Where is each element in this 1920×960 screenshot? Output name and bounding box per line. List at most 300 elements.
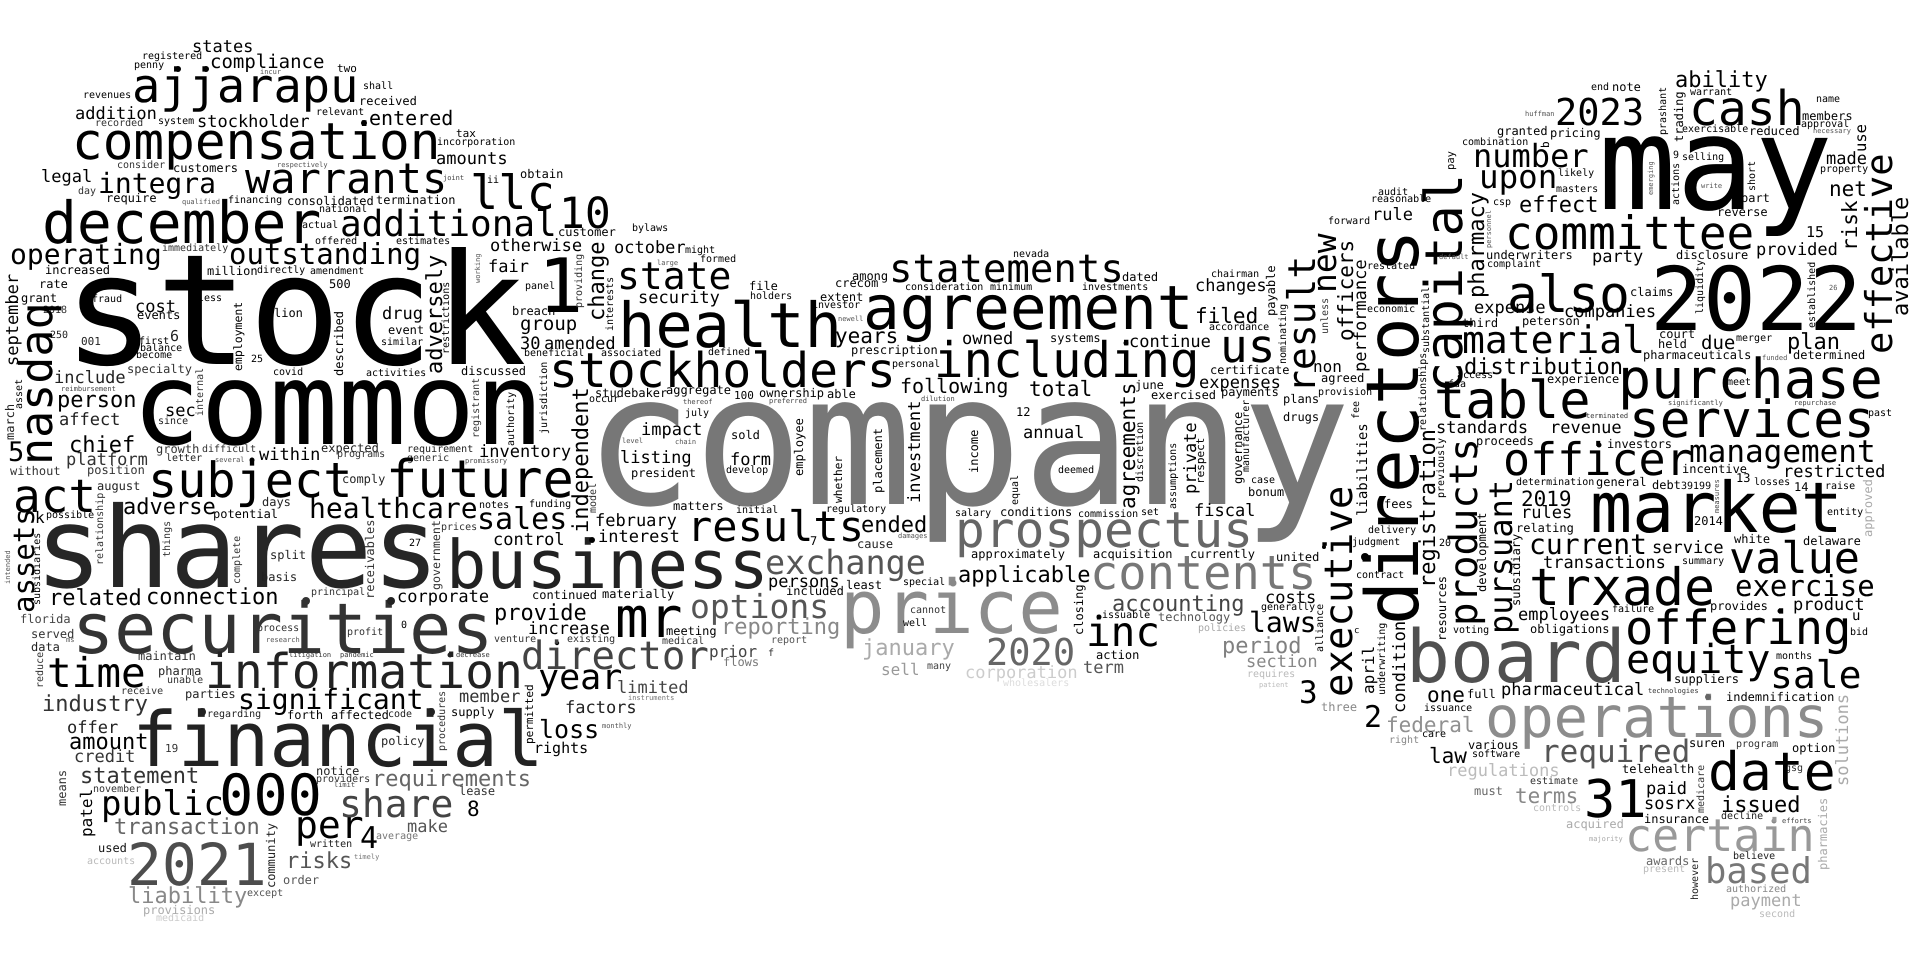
smaller words, middle right: experience — [1547, 372, 1619, 386]
smaller words, upper left: national — [319, 204, 367, 215]
smaller words, lower centre: many — [927, 661, 951, 672]
smaller words, upper right: material — [1462, 318, 1645, 362]
smaller words, lower centre: applicable — [958, 563, 1090, 588]
smaller words, right of centre: relationships — [1418, 353, 1429, 431]
smaller words, upper right: determined — [1793, 348, 1865, 362]
smaller words, upper right: note — [1612, 80, 1641, 94]
smaller words, upper left: integra — [98, 167, 216, 200]
smaller words, upper centre: formed — [700, 254, 736, 265]
smaller words, upper right: disclosure — [1676, 248, 1748, 262]
smaller words, upper centre: state — [617, 254, 731, 298]
smaller words, upper left: grant — [21, 291, 57, 305]
smaller words, middle right: months — [1776, 651, 1812, 662]
smaller words, upper left: march — [3, 404, 17, 440]
smaller words, right of centre: provision — [1318, 387, 1372, 398]
smaller words, upper centre: including — [934, 332, 1200, 389]
smaller words, lower centre: provide — [494, 601, 587, 626]
smaller words, right of centre: filed — [1195, 304, 1258, 328]
smaller words, upper left: activities — [366, 368, 426, 379]
smaller words, middle right: 14 — [1794, 480, 1808, 494]
smaller words, lower centre: acquisition — [1093, 547, 1172, 561]
word: committee: committee — [1505, 206, 1754, 260]
smaller words, middle right: resources — [1435, 576, 1449, 641]
smaller words, lower right: full — [1467, 687, 1496, 701]
smaller words, middle right: meet — [1727, 377, 1751, 388]
smaller words, lower left: decrease — [456, 651, 490, 659]
smaller words, upper left: events — [137, 308, 180, 322]
smaller words, lower left: medicaid — [156, 913, 204, 924]
word: securities: securities — [72, 588, 493, 670]
smaller words, upper left: directly — [257, 265, 305, 276]
smaller words, upper left: event — [388, 323, 424, 337]
smaller words, right of centre: result — [1280, 256, 1324, 393]
smaller words, lower left: liability — [128, 884, 247, 909]
smaller words, lower left: receive — [121, 686, 163, 697]
smaller words, upper centre: able — [827, 387, 856, 401]
smaller words, upper right: also — [1507, 266, 1630, 325]
smaller words, lower centre: monthly — [602, 722, 632, 730]
smaller words, upper left: adversely — [423, 255, 448, 374]
smaller words, upper right: cash — [1689, 81, 1805, 137]
smaller words, right of centre: drugs — [1283, 410, 1319, 424]
smaller words, middle right: 39199 — [1681, 481, 1711, 492]
smaller words, right of centre: dated — [1122, 270, 1158, 284]
smaller words, lower left: litigation — [289, 651, 331, 659]
smaller words, upper centre: jurisdiction — [539, 362, 550, 434]
smaller words, lower centre: least — [846, 578, 882, 592]
smaller words, lower left: relationship — [95, 493, 106, 565]
smaller words, middle right: determination — [1516, 477, 1594, 488]
smaller words, lower right: date — [1708, 742, 1836, 803]
smaller words, lower centre: funding — [529, 499, 571, 510]
smaller words, middle right: fda — [1448, 379, 1466, 390]
smaller words, upper centre: preferred — [769, 397, 807, 405]
smaller words, upper centre: authority — [506, 392, 517, 446]
smaller words, right of centre: rule — [1372, 205, 1413, 225]
smaller words, lower right: technologies — [1648, 687, 1699, 695]
smaller words, right of centre: fee — [1351, 401, 1362, 419]
smaller words, lower centre: period — [1222, 634, 1301, 659]
smaller words, lower left: related — [49, 586, 142, 611]
smaller words, lower left: subject — [148, 453, 352, 509]
smaller words, upper centre: file — [749, 279, 778, 293]
smaller words, upper centre: discussed — [461, 364, 526, 378]
smaller words, lower centre: medical — [662, 636, 704, 647]
smaller words, right of centre: total — [1029, 377, 1092, 401]
smaller words, lower left: except — [247, 888, 283, 899]
smaller words, upper right: expense — [1474, 298, 1546, 318]
smaller words, upper left: offered — [315, 236, 357, 247]
smaller words, middle right: 2014 — [1694, 514, 1723, 528]
smaller words, upper centre: october — [614, 238, 686, 258]
smaller words, lower centre: section — [1246, 652, 1318, 672]
smaller words, upper right: end — [1591, 82, 1609, 93]
smaller words, right of centre: payments — [1221, 385, 1279, 399]
smaller words, lower left: subsidiaries — [32, 533, 43, 605]
smaller words, lower left: unable — [167, 675, 203, 686]
smaller words, upper centre: personal — [892, 359, 940, 370]
smaller words, middle right: incentive — [1682, 462, 1747, 476]
word: market: market — [1590, 467, 1843, 549]
smaller words, lower centre: sell — [881, 660, 920, 679]
smaller words, middle right — [1434, 370, 1892, 697]
smaller words, middle right: product — [1793, 595, 1865, 615]
smaller words, upper centre: holders — [750, 291, 792, 302]
smaller words, lower left: providers — [316, 774, 370, 785]
word: stockholders: stockholders — [549, 343, 896, 399]
smaller words, lower left: time — [47, 649, 146, 697]
smaller words, upper centre: aggregate — [666, 383, 731, 397]
smaller words, lower centre: model — [588, 483, 599, 513]
smaller words, upper left: respectively — [277, 161, 328, 169]
smaller words, lower centre: 3 — [1299, 675, 1318, 711]
smaller words, upper centre: might — [685, 245, 715, 256]
smaller words, middle right: standards — [1436, 418, 1528, 438]
smaller words, lower centre: currently — [1190, 547, 1255, 561]
smaller words, upper left — [3, 37, 557, 465]
smaller words, lower right: pharmacies — [1816, 798, 1830, 870]
smaller words, lower centre: alliance — [1315, 604, 1326, 652]
smaller words, lower centre: year — [538, 658, 622, 698]
word: capital: capital — [1415, 174, 1475, 393]
smaller words, lower left: pandemic — [340, 651, 374, 659]
smaller words, lower right: gsg — [1785, 763, 1803, 774]
smaller words, upper right: provided — [1756, 240, 1838, 260]
smaller words, middle right: development — [1475, 513, 1489, 592]
smaller words, lower right: payment — [1730, 891, 1802, 911]
smaller words, upper right: pricing — [1550, 126, 1601, 140]
smaller words, lower left: order — [283, 873, 319, 887]
smaller words, upper right: net — [1829, 177, 1867, 201]
smaller words, upper right: huffman — [1525, 110, 1555, 118]
smaller words, lower right: program — [1736, 739, 1778, 750]
smaller words, upper centre: inventory — [479, 442, 571, 462]
smaller words, right of centre: previously — [1436, 438, 1447, 498]
smaller words, lower right: authorized — [1726, 884, 1786, 895]
smaller words, upper left: compliance — [210, 51, 324, 73]
smaller words, upper centre: breach — [512, 304, 555, 318]
smaller words, upper right: part — [1741, 191, 1770, 205]
smaller words, lower centre: technology — [1158, 610, 1230, 624]
smaller words, lower centre: corporation — [965, 663, 1078, 683]
smaller words, right of centre: salary — [955, 508, 991, 519]
smaller words, upper left: consider — [117, 160, 165, 171]
smaller words, upper right — [1439, 68, 1914, 380]
word: contents: contents — [1090, 546, 1316, 601]
smaller words, upper right: third — [1462, 316, 1498, 330]
smaller words, upper centre: whether — [832, 456, 845, 503]
smaller words, upper centre: among — [852, 269, 888, 283]
smaller words, upper left: two — [337, 62, 357, 75]
smaller words, lower left: comply — [342, 472, 385, 486]
smaller words, middle right: general — [1596, 475, 1647, 489]
smaller words, lower centre: laws — [1249, 606, 1316, 639]
smaller words, lower left: difficult — [202, 444, 256, 455]
smaller words, upper right: masters — [1556, 184, 1598, 195]
smaller words, lower left: public — [101, 784, 224, 824]
smaller words, middle right: terminated — [1586, 412, 1628, 420]
smaller words, right of centre: continue — [1129, 332, 1211, 352]
smaller words, lower right: majority — [1589, 835, 1623, 843]
smaller words, upper centre: 10 — [559, 189, 611, 239]
smaller words, lower left: lease — [459, 784, 495, 798]
smaller words, upper centre: 100 — [734, 389, 754, 402]
smaller words, lower left: ms — [66, 636, 74, 644]
smaller words, lower left: k — [35, 508, 45, 527]
smaller words, upper left: addition — [75, 104, 157, 124]
smaller words, lower left — [4, 433, 574, 924]
word: december: december — [42, 189, 321, 257]
smaller words, lower centre: well — [903, 618, 927, 629]
smaller words, lower left: corporate — [397, 587, 489, 607]
smaller words, middle right: past — [1868, 408, 1892, 419]
smaller words, lower centre: approximately — [971, 547, 1065, 561]
smaller words, upper centre: newell — [838, 315, 863, 323]
smaller words, lower centre: generally — [1261, 602, 1315, 613]
smaller words, upper right: prashant — [1658, 87, 1669, 135]
smaller words, upper left: immediately — [162, 243, 228, 254]
word: stock: stock — [63, 222, 527, 401]
smaller words, right of centre: audit — [1378, 187, 1408, 198]
smaller words, middle right: delaware — [1803, 534, 1861, 548]
smaller words, upper left: penny — [134, 60, 164, 71]
smaller words, upper right: funded — [1762, 354, 1787, 362]
smaller words, lower centre: inc — [1086, 608, 1160, 656]
smaller words, lower centre: rights — [534, 739, 588, 757]
smaller words, middle right: revenue — [1550, 418, 1622, 438]
smaller words, lower centre: permitted — [523, 684, 536, 744]
smaller words, upper centre: interests — [605, 277, 616, 331]
word: prospectus: prospectus — [955, 501, 1253, 559]
smaller words, lower centre: instruments — [628, 694, 674, 702]
smaller words, lower centre: increase — [528, 619, 610, 639]
smaller words, upper right: due — [1701, 332, 1735, 354]
smaller words, lower centre: control — [493, 530, 565, 550]
smaller words, upper left: joint — [443, 174, 464, 182]
smaller words, right of centre: bonum — [1248, 485, 1284, 499]
smaller words, right of centre: governance — [1231, 412, 1245, 484]
smaller words, upper centre: bylaws — [632, 223, 668, 234]
smaller words, lower left: credit — [74, 747, 135, 767]
smaller words, upper left: drug — [382, 304, 423, 324]
smaller words, lower left: receivables — [363, 520, 377, 599]
smaller words, lower centre: delivery — [1368, 525, 1416, 536]
smaller words, right of centre: deemed — [1058, 465, 1094, 476]
smaller words, lower right: care — [1422, 729, 1446, 740]
smaller words, lower left: used — [98, 841, 127, 855]
smaller words, middle right: 13 — [1736, 471, 1750, 485]
smaller words, lower centre: interest — [598, 527, 680, 547]
smaller words, upper centre: president — [631, 466, 696, 480]
smaller words, lower centre: loss — [539, 715, 599, 744]
smaller words, upper centre: prescription — [851, 343, 938, 357]
smaller words, upper right: short — [1747, 161, 1758, 191]
smaller words, upper centre: panel — [525, 281, 555, 292]
smaller words, lower left: within — [259, 445, 320, 465]
smaller words, lower left: member — [459, 687, 520, 707]
smaller words, lower centre: requires — [1247, 669, 1295, 680]
word: business: business — [446, 526, 769, 604]
smaller words, middle right: management — [1689, 434, 1876, 470]
smaller words, upper left: increased — [45, 263, 110, 277]
smaller words, lower left: data — [31, 640, 60, 654]
smaller words, upper left: relevant — [316, 107, 364, 118]
smaller words, upper left: incorporation — [437, 137, 515, 148]
smaller words, upper left: reimbursement — [61, 385, 116, 393]
smaller words, middle right: bid — [1850, 627, 1868, 638]
smaller words, middle right: voting — [1453, 625, 1489, 636]
smaller words, right of centre: substantial — [1421, 287, 1432, 353]
smaller words, middle right: exercise — [1735, 569, 1875, 603]
smaller words, upper right: complaint — [1487, 259, 1541, 270]
smaller words, lower right: medicare — [1696, 765, 1707, 813]
smaller words, middle right: investors — [1607, 437, 1672, 451]
smaller words, right of centre: equal — [1010, 475, 1021, 505]
smaller words, upper centre: develop — [726, 465, 768, 476]
smaller words, upper left: 2018 — [43, 305, 67, 316]
smaller words, upper left: restrictions — [441, 282, 452, 354]
smaller words, lower right: decline — [1721, 811, 1763, 822]
smaller words, lower left: make — [407, 817, 448, 837]
smaller words, lower centre: prior — [709, 642, 758, 661]
smaller words, upper left: 6 — [170, 327, 179, 345]
smaller words, upper left: system — [158, 116, 194, 127]
smaller words, lower left: 5 — [8, 437, 24, 468]
smaller words, middle right: relating — [1516, 521, 1574, 535]
smaller words, upper right: personnel — [1485, 210, 1493, 248]
smaller words, lower centre: special — [903, 577, 945, 588]
smaller words, lower left: share — [339, 782, 453, 826]
smaller words, lower centre: existing — [567, 634, 615, 645]
smaller words, middle right: debt — [1652, 478, 1681, 492]
smaller words, lower left: 19 — [165, 742, 178, 755]
smaller words, lower right: second — [1759, 909, 1795, 920]
smaller words, upper centre: obtain — [520, 167, 563, 181]
smaller words, lower centre: factors — [565, 698, 637, 718]
word: operations: operations — [1485, 685, 1828, 751]
smaller words, lower centre: accounting — [1112, 592, 1244, 617]
smaller words, upper left: 25 — [251, 354, 263, 365]
smaller words, right of centre: assumptions — [1168, 443, 1179, 509]
smaller words, upper centre: ownership — [759, 386, 824, 400]
smaller words, upper centre: large — [657, 259, 678, 267]
smaller words, upper centre — [461, 166, 1200, 533]
smaller words, lower centre: cause — [857, 537, 893, 551]
smaller words, lower left: risks — [286, 849, 352, 874]
smaller words, right of centre: reasonable — [1371, 194, 1431, 205]
smaller words, lower left: 27 — [409, 538, 421, 549]
smaller words, right of centre: nominating — [1278, 304, 1289, 364]
smaller words, upper centre: llc — [470, 166, 555, 221]
smaller words, lower left: position — [87, 463, 145, 477]
smaller words, upper centre: investment — [905, 401, 925, 503]
smaller words, right of centre: agreements — [1116, 383, 1140, 509]
smaller words, middle right: subsidiary — [1509, 534, 1523, 606]
smaller words, lower centre: notes — [479, 500, 509, 511]
smaller words, upper right: combination — [1462, 137, 1528, 148]
word: compensation: compensation — [72, 113, 440, 172]
smaller words, upper right: 15 — [1806, 223, 1824, 241]
smaller words, lower centre: condition — [1390, 621, 1410, 713]
smaller words, lower centre: reporting — [721, 615, 840, 640]
smaller words, upper centre: otherwise — [490, 236, 582, 256]
smaller words, upper right: reverse — [1717, 205, 1768, 219]
smaller words, lower right: acquired — [1566, 817, 1624, 831]
smaller words, right of centre: performance — [1351, 259, 1371, 372]
smaller words, upper centre: statements — [889, 247, 1124, 292]
smaller words, lower left: written — [310, 839, 352, 850]
smaller words, upper left: asset — [14, 379, 25, 409]
smaller words, upper centre: security — [638, 288, 720, 308]
smaller words, upper left: financing — [228, 195, 282, 206]
smaller words, lower left: provisions — [143, 903, 215, 917]
smaller words, lower right: paid — [1646, 779, 1687, 799]
smaller words, lower left: principal — [311, 587, 365, 598]
smaller words, right of centre: liabilities — [1355, 423, 1371, 516]
smaller words, lower centre: sales — [477, 502, 567, 537]
smaller words, upper left: recorded — [95, 118, 143, 129]
smaller words, lower centre: f — [768, 648, 774, 659]
smaller words, middle right: measures — [1713, 479, 1721, 513]
smaller words, middle right: obligations — [1530, 622, 1609, 636]
smaller words, right of centre: respect — [1194, 438, 1207, 484]
smaller words, upper centre: change — [585, 242, 610, 321]
smaller words, right of centre: annual — [1023, 423, 1084, 443]
smaller words, upper right: warrant — [1690, 87, 1732, 98]
smaller words, right of centre — [955, 187, 1447, 588]
smaller words, upper right: merger — [1736, 333, 1772, 344]
smaller words, lower left: adverse — [123, 495, 216, 520]
smaller words, upper left: estimates — [396, 236, 450, 247]
smaller words, lower centre: 2 — [1364, 700, 1382, 735]
smaller words, lower centre: three — [1321, 700, 1357, 714]
smaller words, lower left: programs — [337, 449, 385, 460]
smaller words, right of centre: registration — [1416, 429, 1441, 588]
word: company: company — [584, 335, 1351, 547]
word: 2022: 2022 — [1650, 248, 1862, 351]
smaller words, upper centre: occur — [589, 394, 619, 405]
smaller words, lower right: various — [1468, 738, 1519, 752]
smaller words, lower right: law — [1429, 744, 1467, 768]
smaller words, lower centre: underwriting — [1377, 623, 1388, 695]
smaller words, middle right: employees — [1518, 605, 1610, 625]
smaller words, lower right: based — [1705, 851, 1812, 892]
smaller words, upper left: employment — [231, 302, 245, 371]
smaller words, lower left: expected — [321, 441, 379, 455]
word: common: common — [132, 338, 544, 471]
smaller words, upper right: distribution — [1464, 355, 1623, 380]
smaller words, lower left: healthcare — [309, 492, 478, 525]
word: 000: 000 — [219, 763, 322, 829]
smaller words, upper left: amendment — [310, 266, 364, 277]
smaller words, lower right: terms — [1515, 784, 1578, 808]
smaller words, upper centre: fair — [488, 257, 529, 277]
smaller words, upper left: rate — [39, 277, 68, 291]
smaller words, lower centre: included — [786, 584, 844, 598]
smaller words, lower left: process — [257, 623, 299, 634]
smaller words, upper left: outstanding — [229, 237, 421, 271]
smaller words, lower left: 0 — [401, 620, 407, 631]
smaller words, upper right: granted — [1497, 124, 1548, 138]
smaller words, upper centre: following — [900, 374, 1008, 398]
smaller words, lower left: intended — [4, 550, 12, 584]
smaller words, right of centre: us — [1220, 319, 1275, 373]
smaller words, right of centre: systems — [1050, 331, 1101, 345]
smaller words, upper left: million — [207, 264, 258, 278]
smaller words, lower centre: persons — [768, 572, 840, 592]
smaller words, lower left: days — [262, 495, 291, 509]
smaller words, middle right: failure — [1612, 604, 1654, 615]
